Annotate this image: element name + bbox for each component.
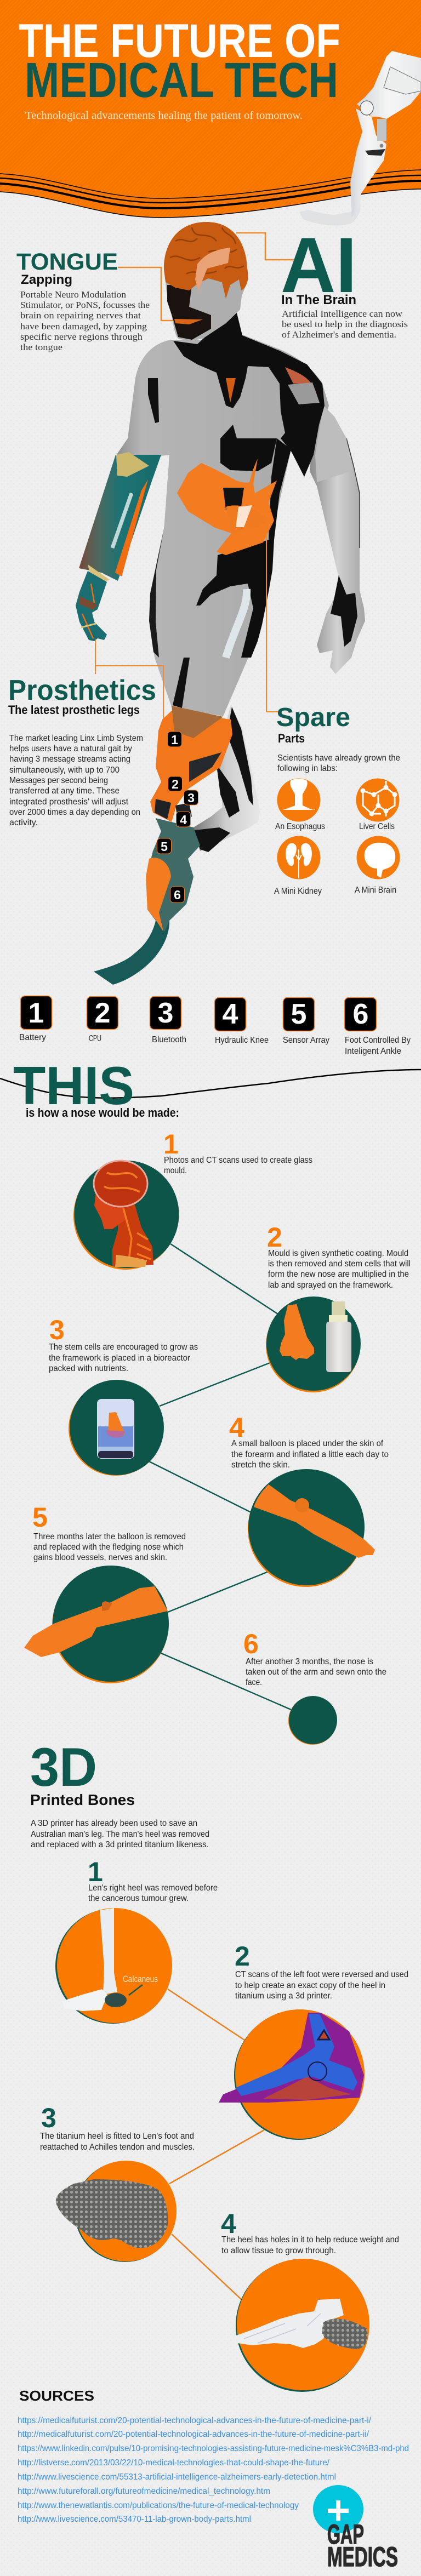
leg white streak <box>226 589 247 658</box>
text block <box>277 753 400 773</box>
foot blade <box>94 921 169 985</box>
torso and front leg <box>116 334 329 716</box>
text block: Artificial Intelligence can now <box>282 309 402 319</box>
subheading: Parts <box>278 732 305 745</box>
leg inner dark <box>173 658 190 708</box>
step 2: Mould is given synthetic coating. Mould <box>268 1249 408 1258</box>
step 5 <box>32 1502 186 1562</box>
step 4 <box>221 2208 399 2255</box>
orange shoulder reflection <box>285 367 317 395</box>
torso left dark patch <box>148 378 159 423</box>
heading: Prosthetics <box>8 675 156 706</box>
step 2 <box>267 1222 411 1290</box>
icon: kidney <box>277 836 320 879</box>
shank orange panel <box>146 858 171 932</box>
step 1: mould. <box>164 1166 187 1175</box>
badge 5 Sensor Array <box>283 997 329 1045</box>
circle 1 foot skeleton <box>55 1908 172 2024</box>
label: An Esophagus <box>275 822 325 831</box>
step 1: Photos and CT scans used to create glass <box>164 1156 312 1165</box>
source links <box>18 2416 409 2524</box>
badge 4 Hydraulic Knee <box>215 997 269 1045</box>
text block: following in labs: <box>277 764 338 773</box>
shoulder highlight <box>288 382 320 404</box>
brain <box>164 222 248 299</box>
piston <box>377 119 386 141</box>
panel: 3D printed bones <box>30 1737 408 2392</box>
step 3: 3 <box>49 1315 65 1345</box>
step 3 <box>49 1315 198 1373</box>
dark panel <box>189 752 221 782</box>
step 5: and replaced with the fledging nose which <box>33 1543 184 1552</box>
source links: https://medicalfuturist.com/20-potential-technological-advances-in-the-future-of-medicine-part-i/ <box>18 2416 372 2425</box>
label: A Mini Kidney <box>274 887 322 896</box>
text block: over 2000 times a day depending on <box>9 808 140 817</box>
step 2: titanium using a 3d printer. <box>235 1991 332 2001</box>
step 2: lab and sprayed on the framework. <box>268 1281 393 1290</box>
circle 5 arm nose <box>24 1566 169 1683</box>
icon: prosthetic forearm <box>79 452 161 582</box>
tibia <box>100 1908 117 1995</box>
logo: Gap Medics <box>313 2485 398 2572</box>
chest highlight <box>226 378 236 403</box>
icon: brain <box>356 836 400 879</box>
text block: helps users have a natural gait by <box>9 744 132 753</box>
subheading: Zapping <box>21 272 72 287</box>
heading: 3D <box>30 1737 97 1797</box>
circle 1 skull scan <box>73 1161 179 1270</box>
step 1: 1 <box>163 1129 179 1160</box>
title <box>19 15 340 108</box>
neck and spine <box>112 1203 153 1266</box>
step 3: The stem cells are encouraged to grow as <box>49 1343 198 1352</box>
number badges on leg: 3 <box>187 791 195 805</box>
step 1: 1 <box>88 1857 103 1887</box>
step 2: 2 <box>235 1941 250 1972</box>
panel: human figure <box>76 222 365 985</box>
subheading: The latest prosthetic legs <box>8 703 140 717</box>
heading: Spare <box>276 703 350 732</box>
face <box>94 1192 126 1229</box>
step 6: face. <box>246 1678 262 1687</box>
title: THE FUTURE OF <box>19 15 340 67</box>
text block <box>282 309 408 340</box>
face orange glint <box>174 319 203 324</box>
source links: http://medicalfuturist.com/20-potential-technological-advances-in-the-future-of-medicine-part-ii/ <box>18 2430 369 2439</box>
text block: specific nerve regions through <box>20 332 143 342</box>
intro text: Australian man's leg. The man's heel was removed <box>31 1830 209 1839</box>
circle 6 <box>288 1696 337 1745</box>
left side dark edge <box>149 526 164 658</box>
vessels <box>104 1173 151 1260</box>
text block <box>9 734 143 827</box>
label: A Mini Brain <box>355 886 396 895</box>
circle 3 titanium heel <box>56 2161 177 2262</box>
badge 3 Bluetooth: 3 <box>158 997 173 1029</box>
step 4: 4 <box>221 2208 236 2239</box>
subheading: Printed Bones <box>30 1791 135 1808</box>
step 6: 6 <box>243 1629 259 1659</box>
step 4: stretch the skin. <box>231 1460 290 1470</box>
socket <box>150 711 232 822</box>
step 2: form the new nose are multiplied in the <box>268 1270 409 1279</box>
chest right silver <box>315 405 351 482</box>
step 2 <box>235 1941 408 2001</box>
step 4: A small balloon is placed under the skin of <box>231 1439 384 1448</box>
orange wave background <box>0 0 421 218</box>
number badges on leg: 5 <box>161 839 168 854</box>
text block: having 3 message streams acting <box>9 755 130 764</box>
intro text: A 3D printer has already been used to save an <box>31 1819 197 1828</box>
panel: nose steps <box>13 1055 411 1745</box>
step 4: to allow tissue to grow through. <box>221 2246 336 2255</box>
foot <box>62 1989 110 2011</box>
foot blade <box>299 204 361 225</box>
source links: http://www.thenewatlantis.com/publications/the-future-of-medical-technology <box>18 2501 299 2510</box>
circle 4 foot with heel <box>236 2259 369 2392</box>
cranium <box>94 1161 147 1207</box>
text block: have been damaged, by zapping <box>20 321 147 332</box>
panel: prosthetics <box>8 675 156 827</box>
callout line: tongue <box>118 267 173 321</box>
step 4: The heel has holes in it to help reduce weight and <box>221 2235 399 2244</box>
abdomen black patch <box>220 425 277 471</box>
badge 1 Battery: 1 <box>29 997 44 1029</box>
circle 2 nose and spray <box>266 1296 361 1392</box>
badge 6 Foot: 6 <box>353 998 368 1030</box>
number badges on leg: 1 <box>171 733 178 747</box>
prosthetic leg <box>94 706 232 985</box>
panel: AI in the brain <box>281 222 408 340</box>
circle 3 bioreactor <box>69 1380 164 1476</box>
text block: activity. <box>9 818 38 827</box>
knee dark <box>155 799 192 822</box>
icon: esophagus <box>277 778 320 822</box>
source links: http://www.futureforall.org/futureofmedicine/medical_technology.htm <box>18 2487 270 2496</box>
step 4: 4 <box>229 1412 244 1443</box>
head silver <box>164 263 248 341</box>
step 5: 5 <box>32 1502 48 1533</box>
step 6 <box>243 1629 386 1687</box>
step 1 <box>88 1857 218 1903</box>
step 6: After another 3 months, the nose is <box>246 1657 373 1666</box>
intro text <box>31 1819 209 1849</box>
text block: of Alzheimer's and dementia. <box>282 329 396 340</box>
step 2: to help create an exact copy of the heel in <box>235 1981 385 1990</box>
number badges on leg: 6 <box>174 888 181 902</box>
right arm dark edge <box>346 438 360 548</box>
badge 2 CPU <box>87 996 118 1043</box>
badge 6 Foot: Inteligent Ankle <box>345 1047 401 1056</box>
text block: transferred at any time. These <box>9 786 120 796</box>
badge 2 CPU: 2 <box>95 997 110 1029</box>
step 6: taken out of the arm and sewn onto the <box>246 1667 386 1677</box>
badge 4 Hydraulic Knee: 4 <box>223 998 238 1030</box>
label: Liver Cells <box>359 822 395 831</box>
socket interior <box>172 706 223 738</box>
text block: the tongue <box>20 342 62 352</box>
callout line: prosthetics <box>95 639 163 719</box>
panel: prosthetic legend <box>19 996 411 1056</box>
source links: http://www.livescience.com/55313-artificial-intelligence-alzheimers-early-detection.html <box>18 2472 336 2482</box>
black chest and neck reflections <box>173 309 325 477</box>
step 2: CT scans of the left foot were reversed and used <box>235 1970 408 1979</box>
face reflection <box>167 285 211 340</box>
badge 6 Foot: Foot Controlled By <box>345 1036 411 1045</box>
step 5: Three months later the balloon is removed <box>33 1532 186 1541</box>
calcaneus label: Calcaneus <box>123 1974 158 1984</box>
step 3 <box>40 2103 195 2152</box>
number badges on leg <box>157 732 198 903</box>
heading: TONGUE <box>16 249 118 275</box>
intro text: and replaced with a 3d printed titanium likeness. <box>31 1840 209 1849</box>
step 3: 3 <box>41 2103 56 2133</box>
text block: Messages per second being <box>9 776 108 785</box>
back leg silver <box>194 706 260 851</box>
panel: spare parts <box>274 703 400 896</box>
title: MEDICAL TECH <box>25 53 338 108</box>
subheading: In The Brain <box>281 293 356 307</box>
right hand dark markings <box>331 575 357 647</box>
heel bone <box>105 1993 127 2007</box>
circle 2 foot scan <box>219 2009 365 2140</box>
badge 3 Bluetooth <box>150 996 186 1044</box>
divider wave line <box>0 1070 421 1098</box>
step 5: gains blood vessels, nerves and skin. <box>33 1553 167 1562</box>
lower shank <box>146 818 200 932</box>
badge 4 Hydraulic Knee: Hydraulic Knee <box>215 1036 269 1045</box>
icon: white prosthetic leg <box>299 51 421 225</box>
socket <box>357 51 421 119</box>
badge 2 CPU: CPU <box>89 1034 101 1043</box>
side black stripe <box>196 438 291 658</box>
panel: tongue zapping <box>16 249 150 352</box>
badge 3 Bluetooth: Bluetooth <box>152 1035 186 1044</box>
text block: simultaneously, with up to 700 <box>9 766 120 775</box>
step 3: The titanium heel is fitted to Len's foot and <box>40 2132 194 2141</box>
circle 4 forearm balloon <box>248 1469 375 1587</box>
wave stripes <box>0 170 421 218</box>
step 3: packed with nutrients. <box>49 1364 128 1373</box>
back leg dark markings <box>195 707 253 852</box>
step 1 <box>163 1129 312 1175</box>
shin <box>350 108 386 218</box>
step 2: is then removed and stem cells that will <box>268 1259 411 1269</box>
step 3: the framework is placed in a bioreactor <box>49 1353 190 1363</box>
step 1: the cancerous tumour grew. <box>88 1894 189 1903</box>
titanium heel <box>322 2318 367 2349</box>
text block: brain on repairing nerves that <box>20 310 141 321</box>
source links: http://listverse.com/2013/03/22/10-medical-technologies-that-could-shape-the-future/ <box>18 2458 330 2468</box>
right arm and hand <box>310 427 365 674</box>
badge 5 Sensor Array: 5 <box>291 998 306 1030</box>
text block: Stimulator, or PoNS, focusses the <box>20 300 150 310</box>
heading: SOURCES <box>19 2387 94 2404</box>
badge 6 Foot <box>344 997 411 1056</box>
logo: Gap Medics: GAP <box>327 2519 364 2550</box>
text block: Scientists have already grown the <box>277 753 400 763</box>
text block: Portable Neuro Modulation <box>20 289 126 300</box>
badge 5 Sensor Array: Sensor Array <box>283 1036 329 1045</box>
subtitle: Technological advancements healing the patient of tomorrow. <box>25 110 303 122</box>
callout line: spare parts <box>266 533 278 712</box>
knee joint <box>360 101 373 115</box>
text block: be used to help in the diagnosis <box>282 319 408 329</box>
heading: AI <box>281 222 357 309</box>
number badges on leg: 2 <box>172 777 179 791</box>
text block <box>20 289 150 352</box>
icon: liver cells <box>356 778 399 822</box>
text block: integrated prosthesis' will adjust <box>9 797 129 807</box>
panel: sources <box>18 2387 409 2572</box>
stomach <box>177 459 277 555</box>
badge 1 Battery <box>19 996 52 1042</box>
step 4 <box>229 1412 389 1470</box>
connector lines <box>149 1244 291 1710</box>
callout line: AI <box>236 233 294 260</box>
step 4: the forearm and inflated a little each day to <box>231 1450 389 1459</box>
source links: http://www.livescience.com/53470-11-lab-grown-body-parts.html <box>18 2515 251 2524</box>
panel: header banner <box>0 0 421 225</box>
step 1: Len's right heel was removed before <box>88 1883 218 1893</box>
foot bones <box>236 2299 344 2348</box>
connector lines <box>168 1989 264 2300</box>
subheading: is how a nose would be made: <box>26 1106 179 1119</box>
step 3: reattached to Achilles tendon and muscles. <box>40 2143 195 2152</box>
source links: https://www.linkedin.com/pulse/10-promising-technologies-assisting-future-medicine-mesk%C3%B3-md-phd <box>18 2444 409 2453</box>
number badges on leg: 4 <box>180 813 187 827</box>
icon: prosthetic hand <box>76 571 107 641</box>
badge 1 Battery: Battery <box>19 1033 46 1042</box>
text block: The market leading Linx Limb System <box>9 734 143 743</box>
step 2: 2 <box>267 1222 282 1253</box>
heading: THIS <box>13 1055 134 1116</box>
